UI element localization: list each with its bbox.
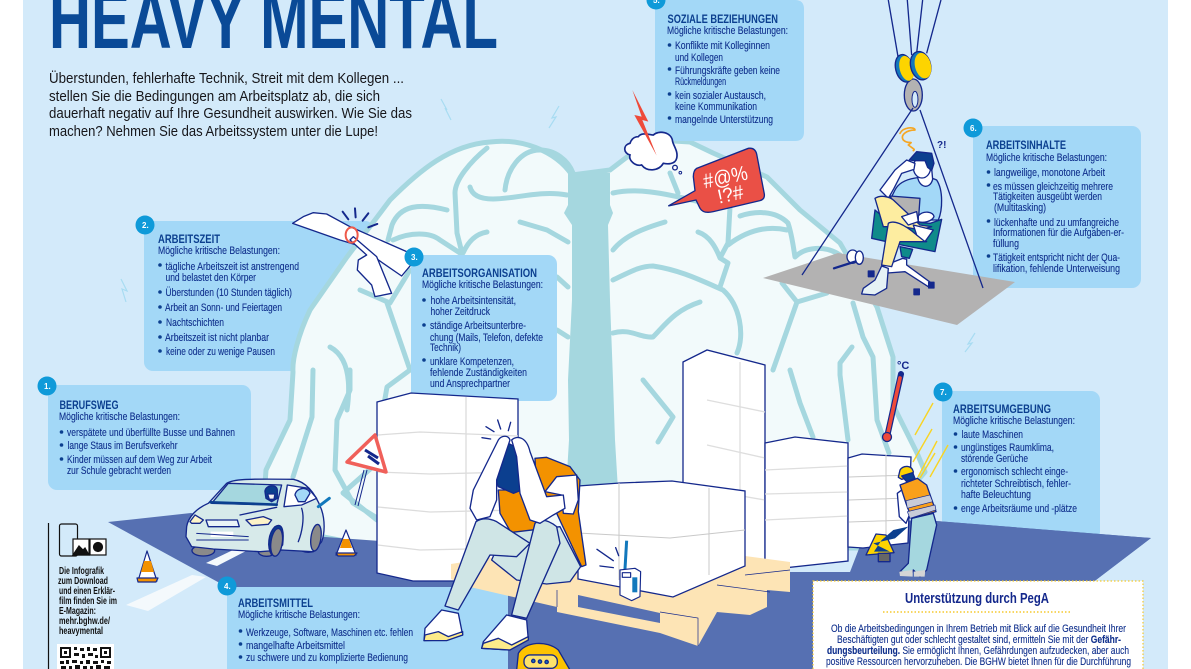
panel 1: Berufsweg: Mögliche kritische Belastungen: (59, 411, 180, 423)
panel 5: Soziale Beziehungen: mangelnde Unterstützung (675, 114, 773, 126)
box stack: left (377, 393, 518, 581)
panel 6: Arbeitsinhalte: Informationen für die Aufgaben-er- (993, 227, 1124, 239)
panel 7: Arbeitsumgebung text: enge Arbeitsräume und -plätze (961, 503, 1077, 515)
grey platform (763, 253, 1015, 325)
panel 6: Arbeitsinhalte: Tätigkeit entspricht nicht der Qua- (993, 252, 1120, 264)
icons: background lightning bolts (121, 99, 975, 352)
panel 6: Arbeitsinhalte: Mögliche kritische Belastungen: (986, 152, 1107, 164)
panel 6: Arbeitsinhalte: lückenhafte und zu umfangreiche (994, 217, 1119, 229)
panel 5: Soziale Beziehungen: Führungskräfte geben keine (675, 65, 780, 77)
panel 3: Arbeitsorganisation: 3. (411, 253, 418, 262)
panel 3: Arbeitsorganisation: chung (Mails, Telefon, defekte (430, 332, 543, 344)
panel 6: Arbeitsinhalte: es müssen gleichzeitig mehrere (993, 181, 1113, 193)
sidebar: download note (48, 523, 117, 669)
panel 3: Arbeitsorganisation: Mögliche kritische Belastungen: (422, 279, 543, 291)
brain illustration (262, 140, 925, 548)
panel: Unterstützung durch PegA (813, 581, 1143, 669)
panel 3: Arbeitsorganisation: Technik) (430, 342, 461, 354)
floor (108, 513, 1151, 669)
panel 6: Arbeitsinhalte: füllung (993, 238, 1019, 250)
panel 5: Soziale Beziehungen: und Kollegen (675, 52, 723, 64)
panel 2: Arbeitszeit text: Arbeit an Sonn- und Feiertagen (165, 302, 282, 314)
icon: warning sign with traffic jam (347, 435, 386, 506)
panel 5: Soziale Beziehungen: kein sozialer Austausch, (675, 90, 766, 102)
sidebar: download note: mehr.bghw.de/ (59, 616, 110, 627)
box stack: right medium (765, 437, 848, 570)
box stack: far right (848, 454, 911, 548)
panel 7 lower edge covered by floor (900, 521, 1151, 583)
panel 7: Arbeitsumgebung text: richteter Schreibtisch, fehler- (961, 478, 1071, 490)
icon: thought cloud, lightning and angry speech bubble: !?# (716, 181, 746, 208)
panel 5: Soziale Beziehungen: keine Kommunikation (675, 101, 757, 113)
panel 5: Soziale Beziehungen: Rückmeldungen (675, 76, 726, 88)
icon: wrist with pain point (293, 208, 415, 297)
icon: traffic cones (137, 530, 357, 582)
illustration: crane hook with ear muffs and ropes (888, 0, 941, 111)
icon: phone, image, video (60, 524, 106, 556)
panel 2: Arbeitszeit text: Nachtschichten (166, 317, 224, 329)
sidebar: download note: Die Infografik (59, 566, 104, 577)
sidebar: download note: zum Download (58, 576, 108, 587)
intro text: Überstunden, fehlerhafte Technik, Streit mit dem Kollegen ... (49, 69, 404, 87)
panel 4: Arbeitsmittel: Mögliche kritische Belastungen: (238, 609, 360, 621)
intro text (49, 69, 412, 140)
panel: ARBEITSUMGEBUNG background (942, 391, 1100, 541)
panel 5: Soziale Beziehungen: Mögliche kritische Belastungen: (667, 25, 788, 37)
illustration: warehouse worker with pallet jack (866, 466, 937, 577)
text: question marks: ?! (937, 140, 946, 151)
road markings (126, 550, 248, 611)
panel 4: Arbeitsmittel (218, 576, 508, 669)
icon: walkie-talkie (620, 541, 641, 601)
panel 3: Arbeitsorganisation: ständige Arbeitsunterbre- (430, 320, 526, 332)
panel 7: Arbeitsumgebung text: ergonomisch schlecht einge- (961, 466, 1068, 478)
panel 6: Arbeitsinhalte: ARBEITSINHALTE (986, 138, 1066, 152)
panel 6: Arbeitsinhalte (964, 118, 1141, 288)
panel 2: Arbeitszeit text: ARBEITSZEIT (158, 232, 221, 246)
panel: ARBEITSZEIT background (144, 221, 374, 371)
panel 1: Berufsweg: BERUFSWEG (60, 398, 118, 412)
panel 4: Arbeitsmittel: Werkzeuge, Software, Maschinen etc. fehlen (246, 627, 413, 639)
panel 7: Arbeitsumgebung text: Mögliche kritische Belastungen: (953, 415, 1075, 427)
panel 1: Berufsweg: 1. (44, 382, 51, 391)
body text (826, 623, 1131, 668)
panel 2: Arbeitszeit text: und belastet den Körper (166, 272, 256, 284)
illustration: car with driver and child (186, 479, 329, 557)
panel 7: Arbeitsumgebung text: hafte Beleuchtung (961, 489, 1031, 501)
panel 5: Soziale Beziehungen (646, 0, 804, 141)
icon: thermometer (882, 360, 909, 442)
panel 2: Arbeitszeit text: Mögliche kritische Belastungen: (158, 245, 280, 257)
platform suspension lines (802, 108, 983, 288)
box stack: back tall (683, 350, 765, 560)
panel 6: Arbeitsinhalte: (Multitasking) (994, 202, 1046, 214)
QR code (57, 644, 114, 669)
wooden pallet (451, 540, 790, 646)
body text: dungsbeurteilung. Sie ermöglicht Ihnen, Gefährdungen aufzudecken, aber auch (827, 645, 1129, 657)
panel 2: Arbeitszeit text: 2. (142, 221, 149, 230)
panel 3: Arbeitsorganisation: hohe Arbeitsintensität, (430, 295, 516, 307)
icon: warning rays (913, 403, 948, 478)
sidebar: download note: E-Magazin: (59, 606, 96, 617)
panel 1: Berufsweg: Kinder müssen auf dem Weg zur Arbeit (67, 454, 212, 466)
intro text: dauerhaft negativ auf Ihre Gesundheit auswirken. Wie Sie das (49, 105, 412, 122)
panel 6: Arbeitsinhalte: langweilige, monotone Arbeit (994, 167, 1105, 179)
illustration: seated person with laptop (834, 128, 942, 295)
panel 3: Arbeitsorganisation: hoher Zeitdruck (430, 306, 490, 318)
panel 4: Arbeitsmittel: zu schwere und zu komplizierte Bedienung (246, 652, 408, 664)
icon: yellow hard hat at bottom (517, 643, 570, 669)
icon: thermometer: °C (897, 360, 909, 372)
sidebar: download note: film finden Sie im (59, 596, 117, 607)
panel 1: Berufsweg: lange Staus im Berufsverkehr (68, 440, 178, 452)
panel 7: Arbeitsumgebung text: ARBEITSUMGEBUNG (953, 402, 1051, 416)
panel 4: Arbeitsmittel: 4. (224, 582, 231, 591)
panel 7: Arbeitsumgebung text: störende Gerüche (961, 453, 1028, 465)
icon: thought cloud, lightning and angry speech bubble: #@% (701, 162, 750, 193)
icon: thought cloud, lightning and angry speech bubble (625, 90, 764, 212)
panel 2: Arbeitszeit text: tägliche Arbeitszeit ist anstrengend (166, 261, 299, 273)
panel 4: Arbeitsmittel: ARBEITSMITTEL (238, 596, 313, 610)
panel 2: Arbeitszeit text (136, 216, 299, 358)
panel 2: Arbeitszeit text: keine oder zu wenige Pausen (166, 346, 275, 358)
panel 5: Soziale Beziehungen: Konflikte mit Kolleginnen (675, 40, 770, 52)
panel 2: Arbeitszeit text: Überstunden (10 Stunden täglich) (166, 287, 292, 299)
panel 7: Arbeitsumgebung text: 7. (940, 388, 947, 397)
sidebar: download note: heavymental (59, 626, 103, 637)
sidebar: download note: und einen Erklär- (59, 586, 115, 597)
panel 7: Arbeitsumgebung text (934, 382, 1077, 515)
panel 5: Soziale Beziehungen: SOZIALE BEZIEHUNGEN (668, 12, 778, 26)
panel 3: Arbeitsorganisation: ARBEITSORGANISATION (422, 266, 537, 280)
panel 3: Arbeitsorganisation: fehlende Zuständigkeiten (430, 367, 527, 379)
panel 6: Arbeitsinhalte: lifikation, fehlende Unterweisung (993, 263, 1120, 275)
panel 3: Arbeitsorganisation (404, 248, 557, 401)
panel 7: Arbeitsumgebung text: laute Maschinen (962, 429, 1023, 441)
illustration: exhausted worker sitting on pallet (424, 420, 619, 650)
panel 6: Arbeitsinhalte: Tätigkeiten ausgeübt werden (993, 191, 1102, 203)
body text: Beschäftigten gut oder schlecht gestaltet sind, ermitteln Sie mit der Gefähr- (837, 634, 1121, 646)
panel 6: Arbeitsinhalte: 6. (970, 124, 977, 133)
panel 2: Arbeitszeit text: Arbeitszeit ist nicht planbar (165, 332, 269, 344)
intro text: stellen Sie die Bedingungen am Arbeitsplatz ab, die sich (49, 88, 380, 105)
panel 7: Arbeitsumgebung text: ungünstiges Raumklima, (961, 442, 1054, 454)
panel 1: Berufsweg: verspätete und überfüllte Busse und Bahnen (67, 427, 235, 439)
heading: Unterstützung durch PegA (905, 590, 1049, 607)
panel 1: Berufsweg (38, 376, 251, 490)
box stack: front on pallet (578, 481, 745, 597)
panel 1: Berufsweg: zur Schule gebracht werden (67, 465, 171, 477)
panel 3: Arbeitsorganisation: unklare Kompetenzen, (430, 356, 514, 368)
intro text: machen? Nehmen Sie das Arbeitssystem unter die Lupe! (49, 123, 378, 140)
panel 4: Arbeitsmittel: mangelhafte Arbeitsmittel (246, 640, 345, 652)
panel 3: Arbeitsorganisation: und Ansprechpartner (430, 378, 510, 390)
